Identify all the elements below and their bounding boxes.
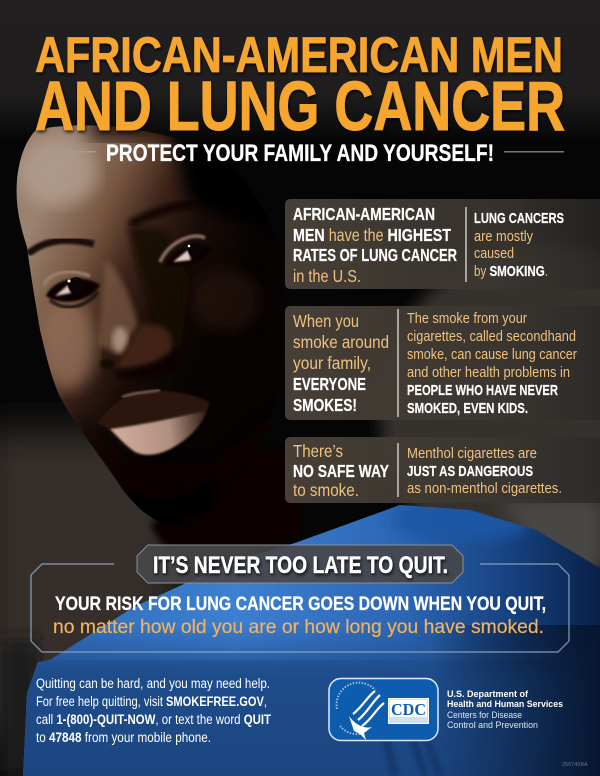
print code: 256749BA xyxy=(562,762,588,768)
nostril xyxy=(100,359,114,369)
text block: quitting help xyxy=(36,676,272,745)
text block: agency name: U.S. Department of xyxy=(447,689,529,700)
text block: agency name: Centers for Disease xyxy=(447,710,522,721)
eye socket and nose shadow xyxy=(126,224,174,304)
upper lip highlight xyxy=(122,390,160,397)
nose underside shadow xyxy=(115,345,180,379)
neck xyxy=(150,450,300,558)
right brow xyxy=(130,203,195,224)
text block: agency name: Health and Human Services xyxy=(447,699,563,710)
shirt xyxy=(0,498,600,776)
panel: menthol: NO SAFE WAY xyxy=(293,461,389,481)
panel: menthol: JUST AS DANGEROUS xyxy=(407,463,533,480)
heading: never too late xyxy=(137,545,463,583)
panel: menthol: There’s xyxy=(293,441,343,461)
callout: quit frame: no matter how old you are or how long you have smoked. xyxy=(53,616,544,638)
lit cheek xyxy=(40,300,96,390)
panel: secondhand smoke xyxy=(285,306,600,420)
panel: highest rates: AFRICAN-AMERICAN xyxy=(293,204,435,224)
callout: quit frame xyxy=(31,564,569,652)
nose tip xyxy=(112,327,128,353)
text block: quitting help: For free help quitting, visit SMOKEFREE.GOV, xyxy=(36,694,267,709)
panel: menthol: as non-menthol cigarettes. xyxy=(407,480,562,497)
subtitle: PROTECT YOUR FAMILY AND YOURSELF! xyxy=(106,140,494,167)
shirt band fade xyxy=(0,625,600,685)
text block: quitting help: to 47848 from your mobile phone. xyxy=(36,730,211,745)
nose wing xyxy=(115,324,173,368)
panel: highest rates: in the U.S. xyxy=(293,266,361,286)
left brow xyxy=(28,240,94,254)
jaw xyxy=(78,416,110,456)
text block: agency name: Control and Prevention xyxy=(447,720,538,731)
title xyxy=(35,27,565,145)
left eye xyxy=(44,272,100,307)
shirt fold xyxy=(382,740,442,776)
panel: menthol xyxy=(285,437,600,503)
head xyxy=(16,125,261,527)
panel: highest rates: are mostly xyxy=(474,228,533,245)
shirt lower band xyxy=(23,660,571,776)
panel: secondhand smoke: When you xyxy=(293,311,359,331)
shirt mid band xyxy=(50,543,600,660)
forehead highlight xyxy=(18,138,98,206)
panel: secondhand smoke: smoke around xyxy=(293,332,389,352)
shirt right shade xyxy=(446,660,600,776)
panel: highest rates: caused xyxy=(474,245,514,262)
panel: secondhand smoke: cigarettes, called secondhand xyxy=(407,328,576,345)
panel: menthol: Menthol cigarettes are xyxy=(407,445,537,462)
text block: quitting help: call 1-(800)-QUIT-NOW, or text the word QUIT xyxy=(36,712,272,727)
panel: secondhand smoke: SMOKES! xyxy=(293,395,357,415)
upper right shade xyxy=(164,136,264,218)
panel: highest rates: RATES OF LUNG CANCER xyxy=(293,245,457,265)
panel: secondhand smoke: and other health problems in xyxy=(407,364,570,381)
panel: secondhand smoke: your family, xyxy=(293,353,371,373)
right eye xyxy=(160,236,213,266)
panel: highest rates: MEN have the HIGHEST xyxy=(293,225,451,245)
nose bridge xyxy=(98,260,138,355)
panel: highest rates: by SMOKING. xyxy=(474,263,548,280)
panel: highest rates xyxy=(285,199,600,289)
upper lip xyxy=(97,391,210,429)
icon: HHS and CDC logo: CDC xyxy=(391,700,426,719)
shirt upper shade xyxy=(390,498,530,542)
goatee xyxy=(134,484,211,518)
panel: menthol: to smoke. xyxy=(293,480,359,500)
panel: secondhand smoke: EVERYONE xyxy=(293,374,366,394)
forehead shade at top xyxy=(80,126,178,143)
panel: secondhand smoke: SMOKED, EVEN KIDS. xyxy=(407,400,528,417)
panel: highest rates: LUNG CANCERS xyxy=(474,210,564,227)
text block: agency name xyxy=(447,689,563,731)
text block: quitting help: Quitting can be hard, and you may need help. xyxy=(36,676,270,691)
icon: HHS and CDC logo xyxy=(329,678,438,740)
heading: never too late: IT’S NEVER TOO LATE TO QUIT. xyxy=(153,552,448,579)
right cheek xyxy=(190,268,260,332)
panel: secondhand smoke: The smoke from your xyxy=(407,310,527,327)
lower lip xyxy=(110,410,207,455)
